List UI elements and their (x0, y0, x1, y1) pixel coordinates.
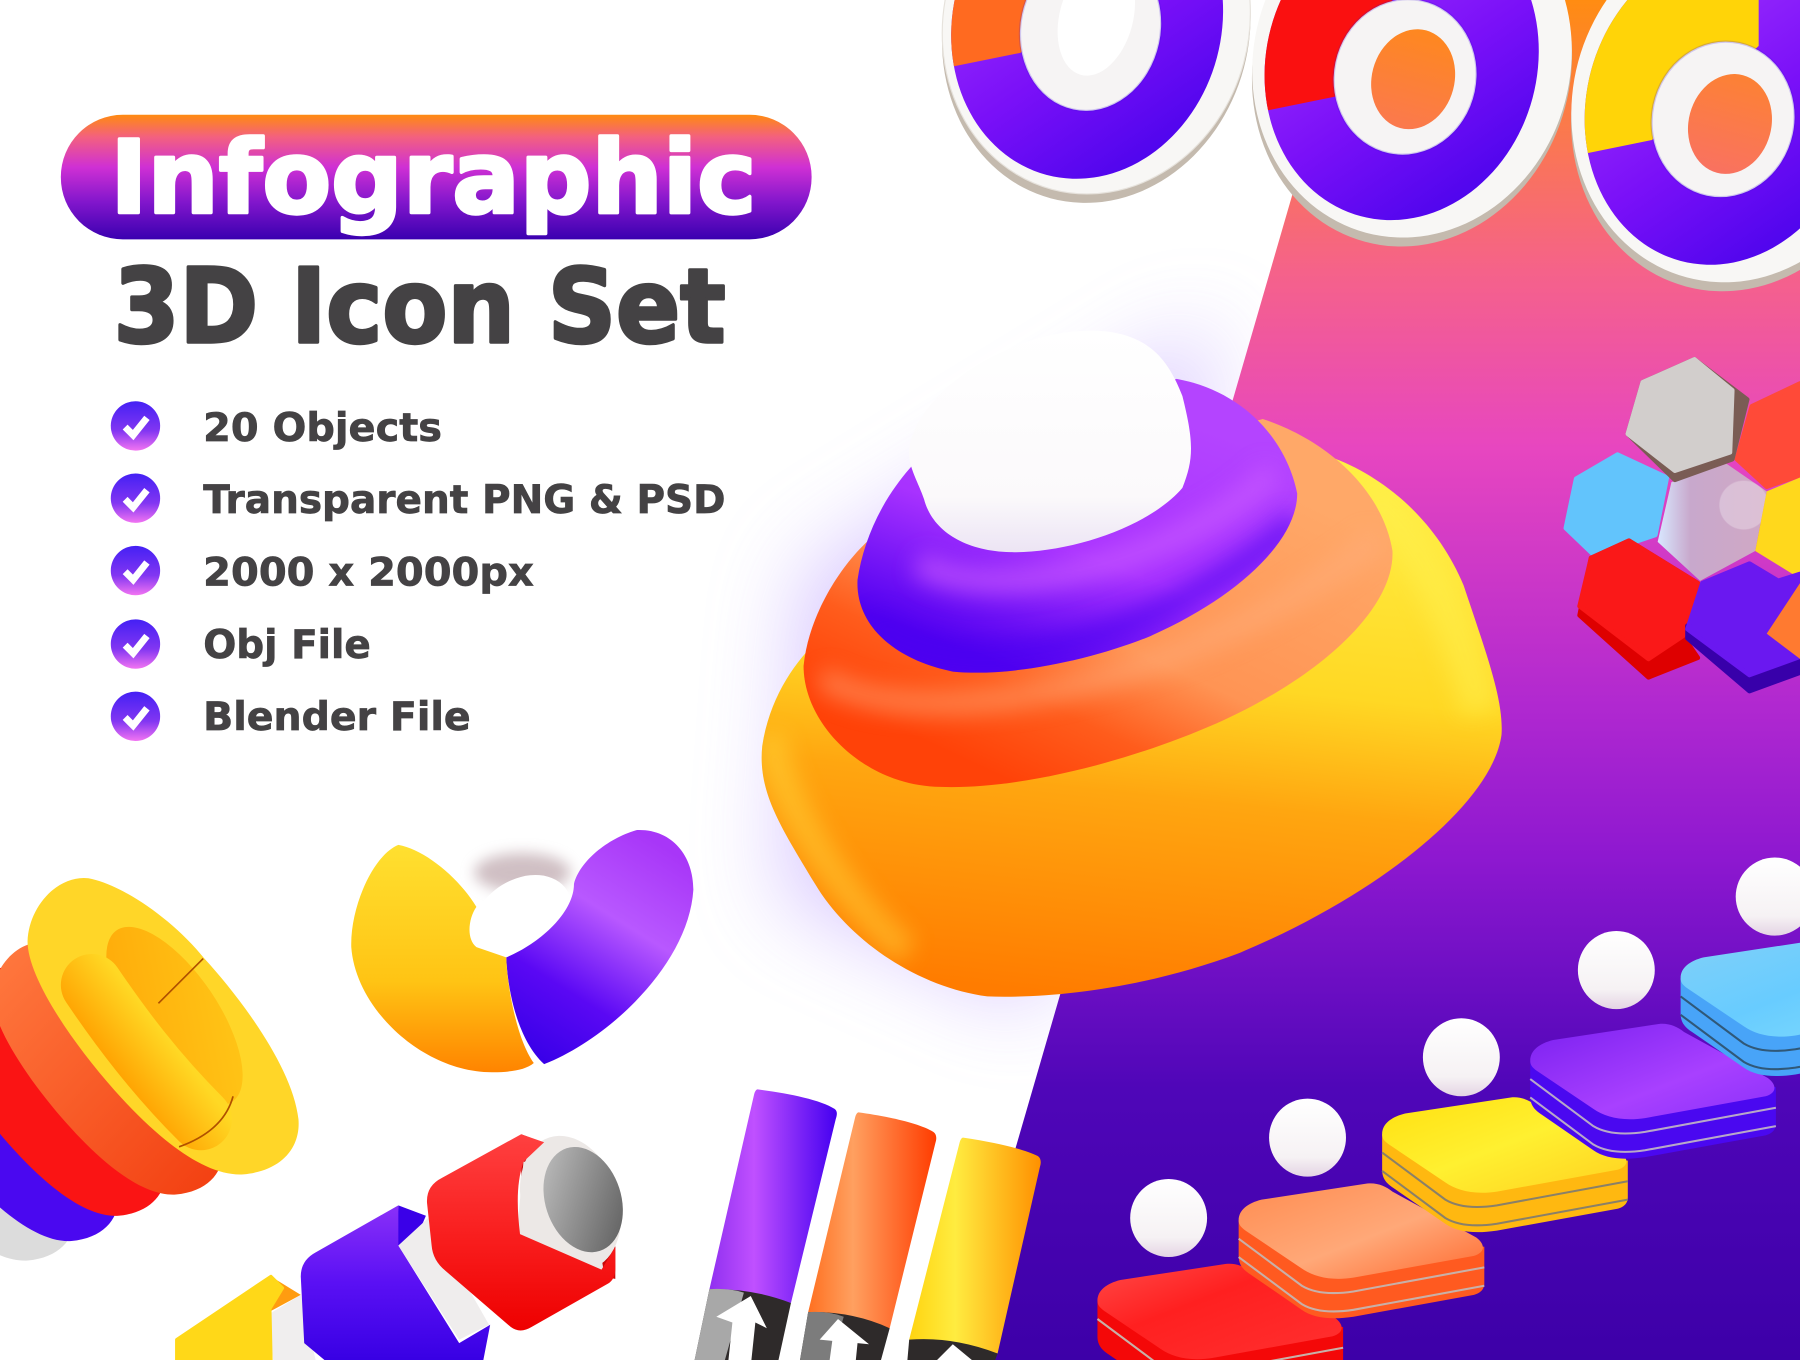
donut chart 3 (1571, 0, 1800, 292)
bar: orange (799, 1112, 936, 1360)
bar: purple (693, 1089, 837, 1360)
donut yellow half (351, 845, 534, 1072)
item: obj file (111, 619, 371, 669)
hex: red large (1580, 541, 1698, 677)
layer: white cap (909, 331, 1191, 552)
item: 20 objects (111, 401, 442, 451)
item: blender file: Blender File (203, 695, 471, 740)
layer: orange (804, 419, 1393, 787)
yellow sleeve back (271, 1277, 301, 1311)
hex: blue (1566, 455, 1667, 556)
donut purple half (506, 830, 693, 1064)
glass circle (1720, 481, 1768, 529)
donut chart 1 (942, 0, 1251, 203)
yellow sleeve (177, 1277, 282, 1360)
ball 2 (1269, 1099, 1346, 1177)
red sleeve front (427, 1134, 615, 1330)
ring yellow (28, 878, 299, 1174)
hex: purple (1688, 564, 1800, 691)
soft lilac glow behind the stacked object (781, 321, 1217, 1010)
central stacked pyramid icon (762, 331, 1502, 997)
cylinder segments icon (177, 1123, 638, 1360)
item: resolution (111, 546, 534, 595)
white core lower (269, 1295, 316, 1360)
step: blue (1681, 941, 1800, 1076)
hexagon cluster chart (1566, 359, 1800, 691)
title word: Infographic (110, 118, 757, 236)
item: 20 objects: 20 Objects (203, 406, 442, 451)
white core middle (398, 1218, 489, 1340)
donut hole (457, 857, 588, 979)
ring blue (0, 989, 118, 1241)
ring red (0, 964, 165, 1216)
item: blender file (111, 692, 471, 741)
bar chart with arrows (693, 1089, 1041, 1360)
white cylinder body (503, 1123, 638, 1283)
purple sleeve (301, 1205, 490, 1360)
title pill (61, 115, 812, 239)
red sleeve back (521, 1134, 615, 1279)
ball 1 (1130, 1179, 1207, 1257)
step: orange (1239, 1183, 1484, 1318)
step: yellow (1382, 1097, 1628, 1232)
hex: orange (1767, 583, 1800, 659)
ball 4 (1578, 931, 1655, 1009)
donut inner shadow (474, 853, 571, 892)
layer: purple (857, 379, 1297, 673)
layer: yellow base (762, 453, 1502, 997)
ball 3 (1423, 1018, 1500, 1096)
bar: yellow (907, 1138, 1041, 1360)
step: red (1097, 1264, 1343, 1360)
hex: grey (1628, 359, 1747, 480)
hex: yellow (1755, 478, 1800, 579)
stacked rings icon (0, 878, 299, 1261)
feature list (111, 401, 726, 741)
item: resolution: 2000 x 2000px (203, 550, 534, 595)
item: transparent png and psd: Transparent PNG & PSD (203, 478, 726, 523)
purple sleeve back (396, 1205, 426, 1246)
split donut icon (351, 830, 693, 1072)
grey cap (530, 1137, 636, 1263)
step: purple (1530, 1024, 1776, 1159)
hex: red top right (1737, 383, 1800, 487)
ring white (0, 1009, 75, 1261)
staircase chart (1097, 858, 1800, 1360)
white cylinder fill (517, 1159, 604, 1272)
ball 5 (1736, 858, 1800, 936)
ring orange (0, 943, 223, 1195)
donut chart 2 (1252, 0, 1572, 246)
subtitle: 3D Icon Set (114, 248, 726, 367)
hex: glass centre (1658, 464, 1767, 581)
background: diagonal gradient panel (954, 0, 1800, 1360)
item: obj file: Obj File (203, 623, 371, 668)
